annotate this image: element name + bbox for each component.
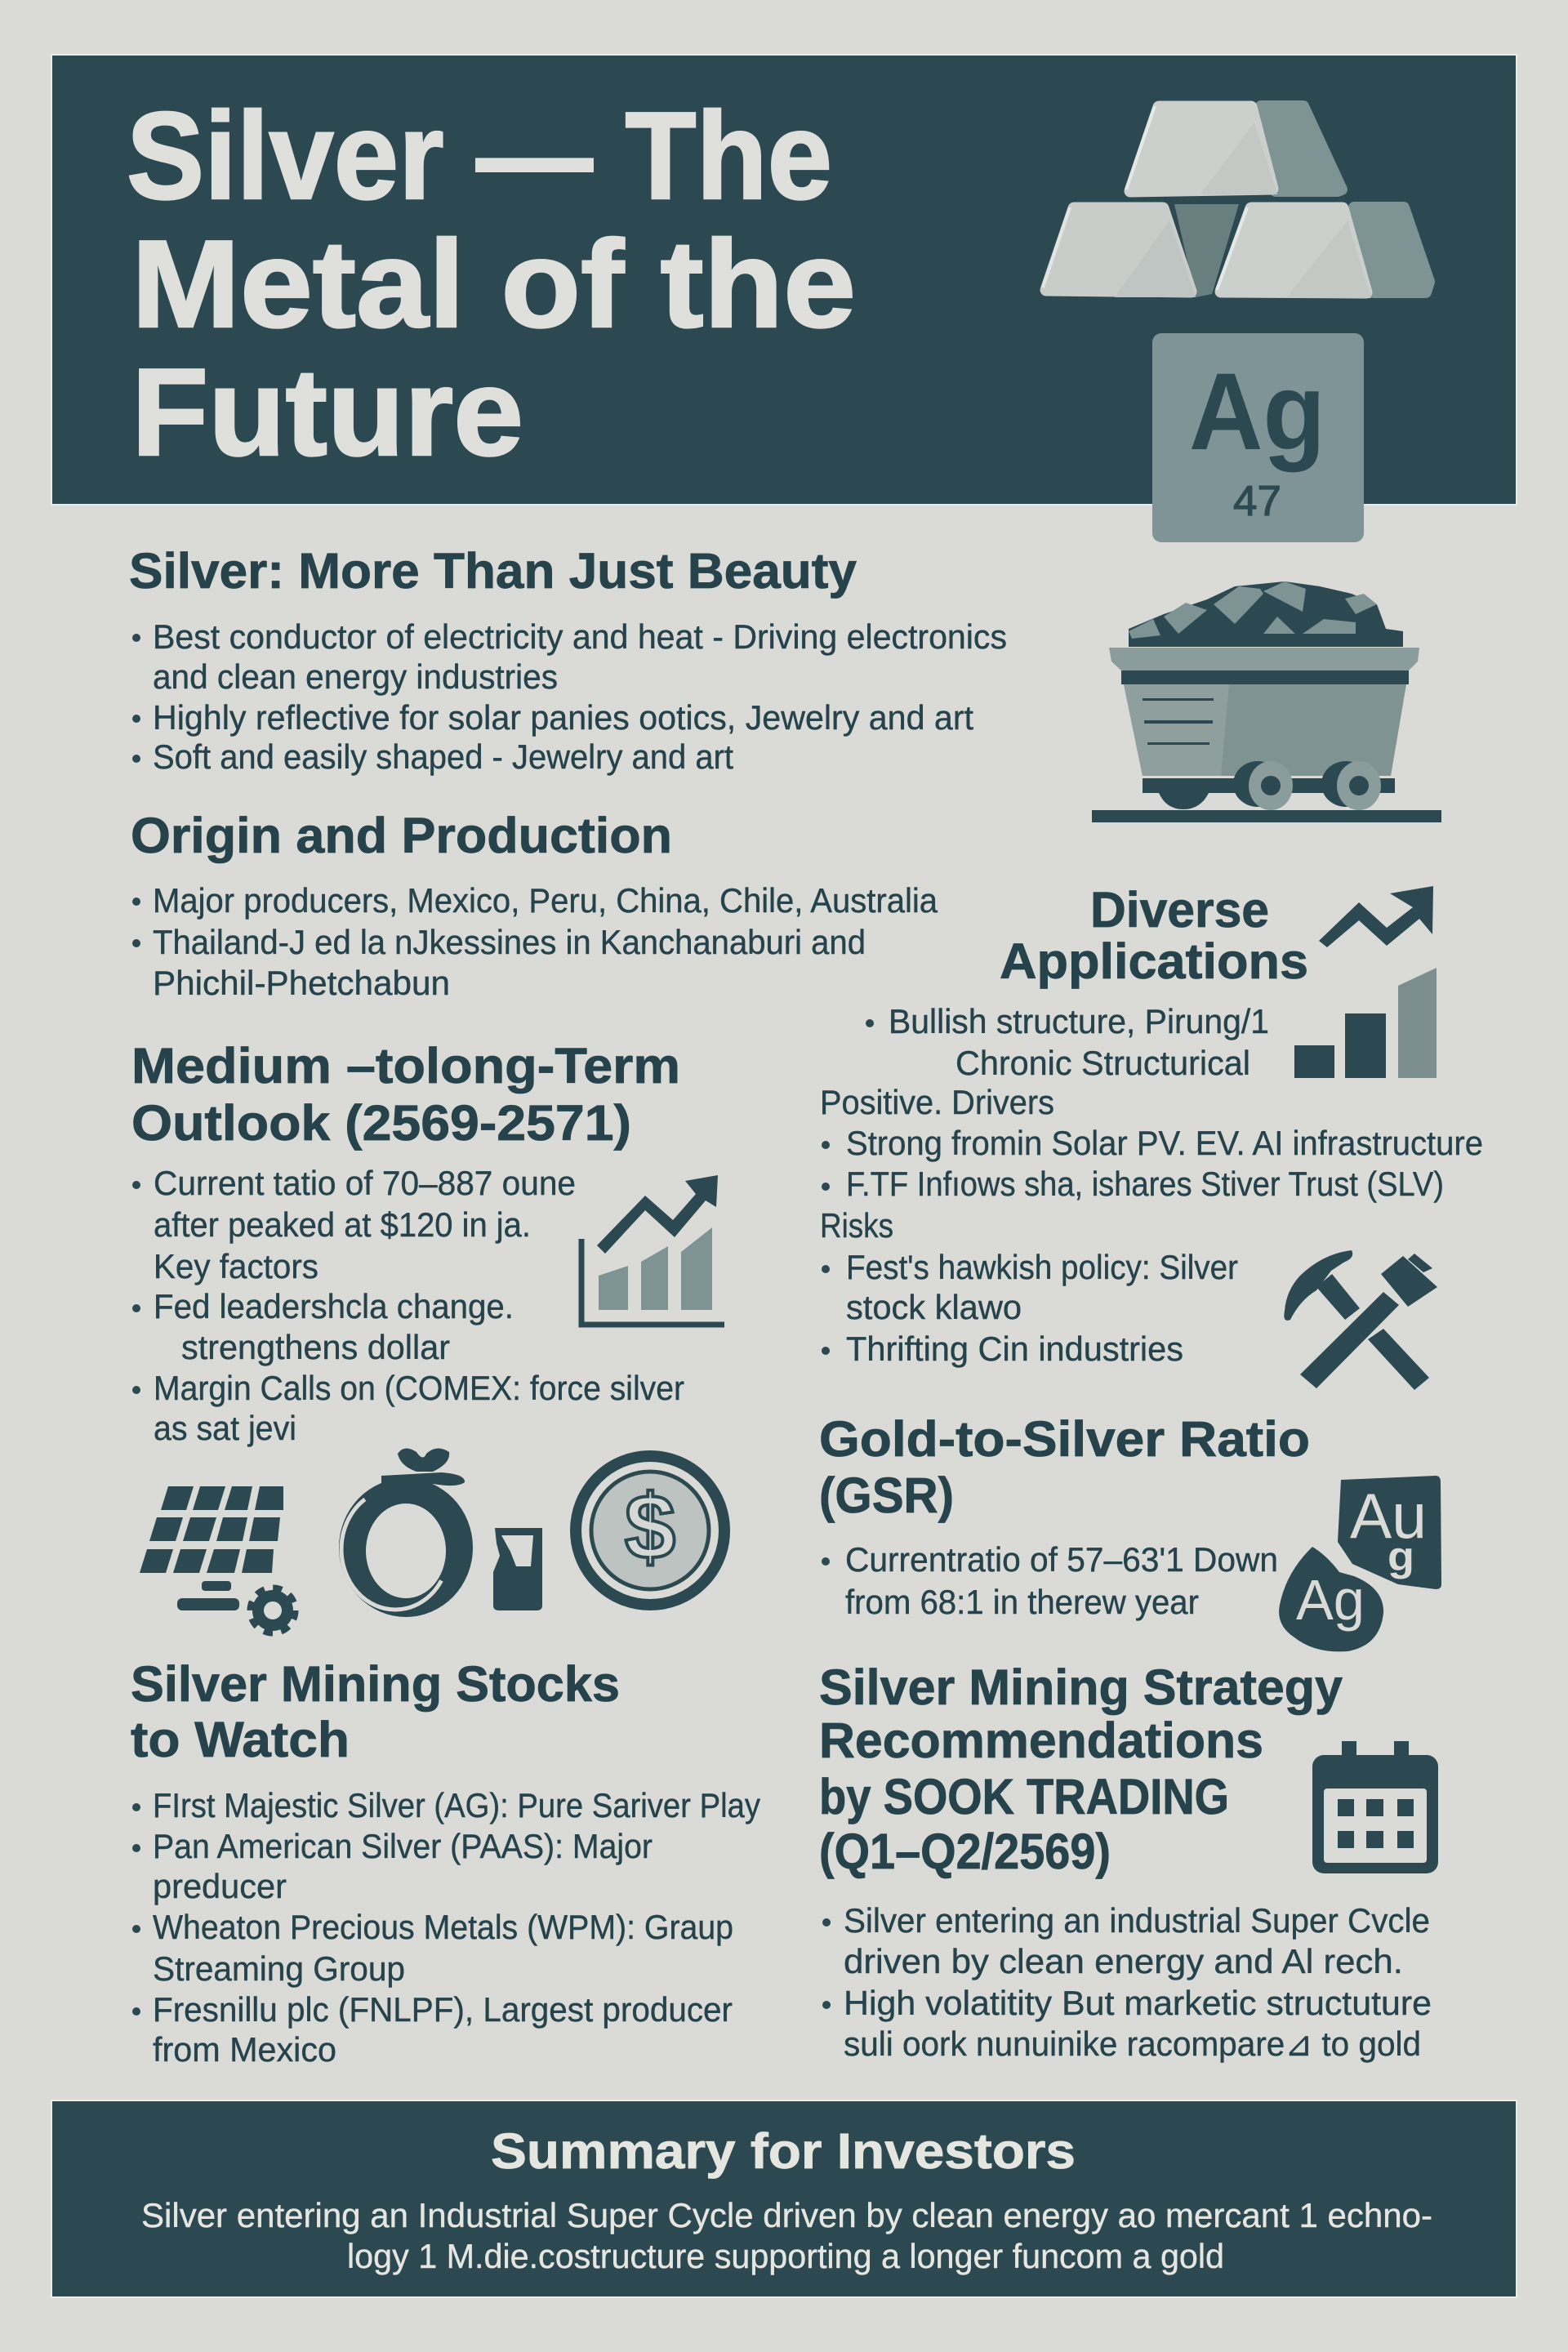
heading: Silver Mining Stocks [131,1656,620,1712]
bullet list: Strong fromin Solar PV. EV. AI infrastructure [846,1124,1483,1162]
icon: periodic table tile Ag 47: Ag [1189,351,1325,473]
heading [819,1411,1310,1523]
bullet list [820,1002,1483,1368]
icon: dollar coin [576,1456,724,1605]
panel: origin and production [131,808,938,1002]
icon: mine cart [1092,581,1441,822]
heading [131,1038,680,1151]
title: Future [131,343,523,482]
bullet list: Fest's hawkish policy: Silver [846,1248,1238,1286]
bullet list: Thrifting Cin industries [846,1330,1183,1368]
bullet list: Phichil-Phetchabun [153,964,450,1002]
icon: solar panel with gear [140,1486,295,1633]
bullet list: Streaming Group [153,1949,405,1988]
bullet list: Wheaton Precious Metals (WPM): Graup [153,1908,733,1946]
bullet list: Best conductor of electricity and heat - Driving electronics [153,617,1007,656]
bullet list: Positive. Drivers [820,1083,1054,1121]
bullet list [822,1901,1432,2063]
bullet list [132,617,1007,776]
heading [131,1656,620,1767]
heading: to Watch [131,1712,350,1767]
bullet list: Pan American Silver (PAAS): Major [153,1827,653,1865]
icon: Au and Ag symbols: Au [1350,1480,1427,1552]
icon: dollar coin: $ [625,1476,675,1578]
icon: zigzag arrow [1319,886,1433,947]
panel: diverse applications [820,882,1483,1390]
bullet list: from 68:1 in therew year [845,1583,1199,1621]
bullet list: F.TF Infıows sha, ishares Stiver Trust (SLV) [846,1165,1444,1203]
icon: Au and Ag symbols: Ag [1296,1568,1365,1632]
title [127,87,856,482]
icon: silver bars [1043,106,1429,298]
heading: Silver Mining Strategy [819,1659,1343,1715]
bullet list: Fresnillu plc (FNLPF), Largest producer [153,1990,733,2029]
heading: Recommendations [819,1713,1263,1768]
bullet list [132,1786,760,2069]
icon: periodic table tile Ag 47 [1152,333,1364,542]
icon: crossed pick and hammer [1284,1250,1437,1390]
bullet list: Fed leadershcla change. [154,1287,514,1325]
heading [1000,882,1308,989]
bullet list: Soft and easily shaped - Jewelry and art [153,737,733,776]
footer: summary for investors [51,2100,1517,2297]
bullet list: Margin Calls on (COMEX: force silver [154,1369,684,1407]
bullet list: as sat jevi [154,1409,296,1447]
bullet list: stock klawo [846,1288,1022,1326]
footer text: Silver entering an Industrial Super Cycle driven by clean energy ao mercant 1 echno- [141,2196,1432,2234]
icon: rising chart [581,1175,724,1325]
panel: strategy recommendations [819,1659,1438,2063]
bullet list: from Mexico [153,2030,336,2069]
heading [819,1659,1343,1879]
bullet list: Key factors [154,1247,318,1285]
panel: gold to silver ratio [819,1411,1441,1651]
bullet list: Currentratio of 57–63'1 Down [845,1540,1278,1579]
bullet list: Current tatio of 70–887 oune [154,1164,576,1202]
heading: Origin and Production [131,808,672,863]
heading: Medium –tolong-Term [131,1038,680,1094]
panel: silver more than just beauty [129,543,1007,776]
panel: silver mining stocks to watch [131,1656,760,2069]
bullet list: Thailand-J ed la nJkessines in Kanchanaburi and [153,923,866,961]
bullet list [822,1540,1278,1621]
icon: small silver bottle [493,1528,542,1610]
icon: Au and Ag symbols [1279,1476,1441,1651]
bullet list: preducer [153,1867,287,1905]
bullet list [132,881,938,1002]
heading: (Q1–Q2/2569) [819,1824,1111,1879]
bullet list: High volatitity But marketic structuture [844,1984,1432,2022]
bullet list: Major producers, Mexico, Peru, China, Chile, Australia [153,881,938,920]
footer text [141,2196,1432,2275]
icon: silver ring [339,1448,473,1617]
title: Metal of the [131,215,856,354]
heading: Applications [1000,933,1308,989]
footer heading: Summary for Investors [491,2123,1076,2179]
bullet list: suli oork nunuinike racompare⊿ to gold [844,2025,1421,2063]
icon: periodic table tile Ag 47: 47 [1233,478,1281,525]
bullet list: Silver entering an industrial Super Cvcle [844,1901,1430,1940]
header banner [51,55,1517,542]
heading: Diverse [1090,882,1269,938]
icon: calendar [1312,1741,1438,1873]
bullet list: and clean energy industries [153,657,558,696]
heading: by SOOK TRADING [819,1769,1229,1824]
icon: bar chart [1294,968,1437,1078]
heading: Outlook (2569-2571) [131,1095,631,1151]
bullet list: strengthens dollar [181,1328,450,1366]
footer text: logy 1 M.die.costructure supporting a longer funcom a gold [347,2237,1224,2275]
bullet list: driven by clean energy and Al rech. [844,1942,1403,1980]
heading: Silver: More Than Just Beauty [129,543,857,599]
title: Silver — The [127,87,832,225]
bullet list [132,1164,684,1447]
bullet list: Highly reflective for solar panies ootics, Jewelry and art [153,698,973,737]
icon: Au and Ag symbols: g [1388,1534,1414,1579]
bullet list: after peaked at $120 in ja. [154,1205,531,1244]
bullet list: Risks [820,1206,893,1245]
bullet list: Chronic Structurical [956,1044,1250,1082]
bullet list: FIrst Majestic Silver (AG): Pure Sariver Play [153,1786,760,1824]
bullet list: Bullish structure, Pirung/1 [889,1002,1269,1040]
heading: Gold-to-Silver Ratio [819,1411,1310,1467]
panel: medium to long term outlook [131,1038,724,1447]
heading: (GSR) [819,1468,954,1523]
